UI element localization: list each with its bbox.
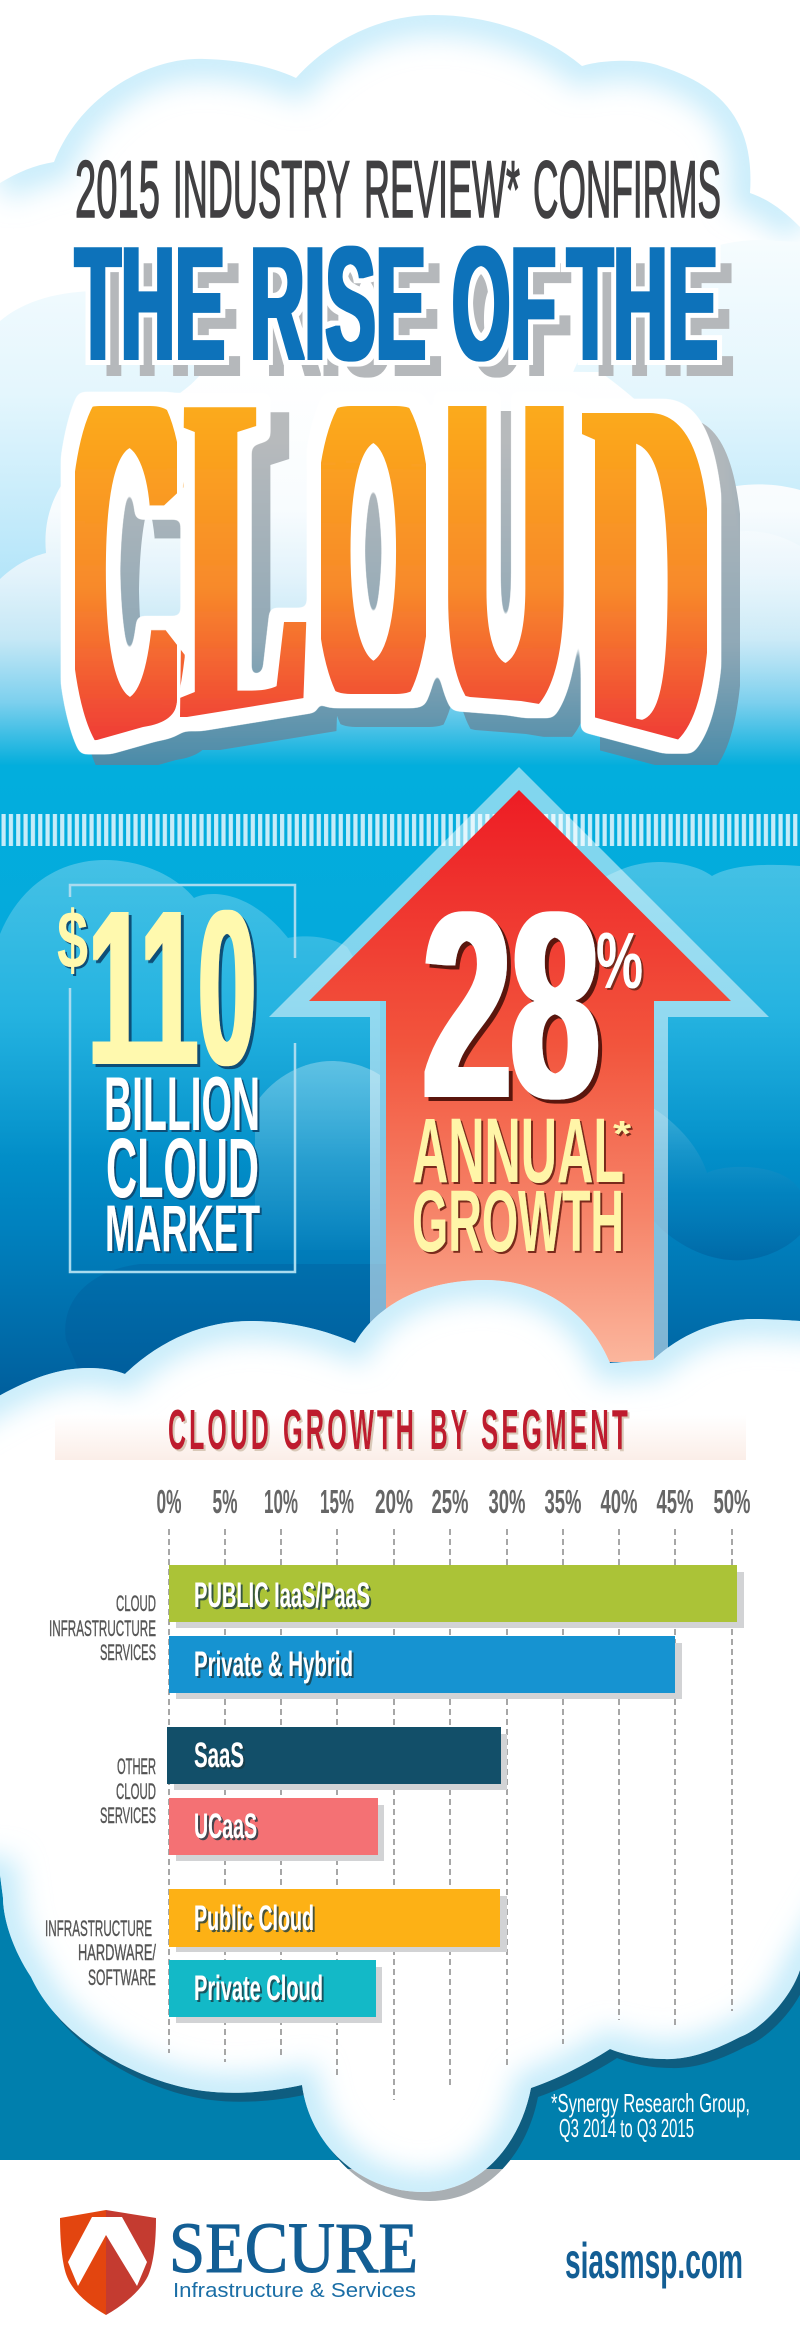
arrow body (309, 790, 731, 1362)
chart heading: BY (430, 1398, 470, 1462)
chart heading band (55, 1415, 746, 1460)
title: the rise of the: THE (91, 230, 241, 410)
icon: secure shield logo (60, 2210, 156, 2315)
title: the rise of the: RISE (250, 214, 426, 394)
title: cloud lettering: U (445, 306, 567, 808)
arrow outer glow (269, 767, 769, 1362)
axis labels: 5% (212, 1483, 238, 1520)
title line: 2015 industry review (75, 145, 721, 235)
axis labels: 25% (432, 1483, 468, 1520)
axis labels: 15% (320, 1483, 354, 1520)
category label: infrastructure hardware software: SOFTWARE (88, 1965, 156, 1990)
title line: 2015 industry review: INDUSTRY (173, 145, 350, 235)
box outline (70, 885, 295, 1272)
title: cloud lettering: C (70, 276, 182, 868)
blue market section background (0, 765, 800, 1425)
bar: private and hybrid (169, 1636, 675, 1693)
lower blue band (0, 1420, 800, 2160)
category label: cloud infrastructure services: SERVICES (100, 1640, 156, 1665)
bar: private cloud (169, 1960, 376, 2017)
company name: secure: SECURE (169, 2208, 418, 2288)
title: cloud lettering: L (183, 297, 307, 818)
category label: cloud infrastructure services: INFRASTRUCTURE (49, 1616, 156, 1641)
category label: infrastructure hardware software: HARDWARE/ (78, 1940, 157, 1965)
percent sign: % (596, 916, 643, 1005)
axis labels (156, 1483, 750, 1520)
axis labels: 45% (656, 1483, 694, 1520)
axis labels: 20% (375, 1483, 413, 1520)
category label: other cloud services: SERVICES (100, 1803, 156, 1828)
chart heading: CLOUD (168, 1398, 272, 1462)
title: cloud lettering: U (464, 325, 586, 827)
28 number: 28 (423, 857, 599, 1154)
bar: ucaas (169, 1798, 378, 1855)
market label: BILLION (104, 1062, 260, 1147)
market label: CLOUD (106, 1121, 259, 1215)
market label (104, 1062, 260, 1265)
back cloud with inner glow (0, 15, 800, 242)
market label: MARKET (105, 1191, 260, 1265)
value box: 110 billion cloud market (57, 864, 295, 1272)
title: the rise of the: OF (452, 214, 556, 394)
annual growth label: GROWTH (412, 1173, 624, 1270)
category label: other cloud services (100, 1754, 156, 1828)
bar labels: PUBLIC IaaS/PaaS (194, 1576, 370, 1615)
chart heading (168, 1398, 631, 1462)
sky background (0, 0, 800, 800)
company tagline: Infrastructure & Services (173, 2280, 416, 2302)
category label: cloud infrastructure services (49, 1591, 156, 1665)
axis labels: 30% (488, 1483, 526, 1520)
axis labels: 35% (544, 1483, 582, 1520)
title: cloud lettering: L (202, 316, 326, 837)
category label: infrastructure hardware software: INFRASTRUCTURE (45, 1916, 152, 1941)
title: the rise of the (75, 214, 734, 410)
title: the rise of the: THE (75, 214, 225, 394)
cloud shadow (53, 1970, 800, 2201)
category label: infrastructure hardware software (45, 1916, 157, 1990)
middle cloud layer (0, 240, 800, 800)
title: cloud lettering: L (183, 297, 307, 818)
growth arrow (269, 767, 769, 1362)
bar shadows (174, 1572, 744, 2023)
axis labels: 10% (264, 1483, 298, 1520)
bar labels: Public Cloud (194, 1899, 314, 1938)
title line: 2015 industry review: REVIEW* (364, 145, 520, 235)
value box: 110 billion cloud market: 110 (88, 864, 256, 1111)
title line: 2015 industry review: 2015 (75, 145, 160, 235)
translucent background clouds (0, 860, 800, 1420)
bar labels: UCaaS (194, 1807, 257, 1846)
chart heading: GROWTH (283, 1398, 417, 1462)
bar chart: cloud growth by segment (45, 1483, 750, 2100)
annual growth label: ANNUAL (412, 1100, 624, 1202)
bar: public iaas/paas (169, 1565, 737, 1622)
title: cloud lettering: O (316, 291, 431, 811)
front sky cloud layer (0, 371, 800, 800)
bar: public cloud (169, 1889, 500, 1947)
annual growth label (412, 1100, 631, 1270)
pale right cloud (705, 531, 800, 700)
bar labels: Private Cloud (194, 1969, 323, 2008)
axis labels: 0% (156, 1483, 182, 1520)
bar labels (194, 1576, 370, 2008)
title: the rise of the: THE (75, 214, 225, 394)
title: cloud lettering: U (445, 306, 567, 808)
title: cloud lettering: O (335, 310, 450, 830)
category label: other cloud services: OTHER (117, 1754, 156, 1779)
axis labels: 40% (600, 1483, 638, 1520)
title: cloud lettering (60, 392, 740, 765)
footnote (551, 2088, 750, 2143)
category label: other cloud services: CLOUD (116, 1779, 156, 1804)
title: the rise of the: RISE (250, 214, 426, 394)
striped band (0, 814, 800, 846)
foreground cloud panel (0, 1270, 800, 2200)
category label: cloud infrastructure services: CLOUD (116, 1591, 156, 1616)
annual growth label: * (613, 1113, 631, 1154)
title: cloud lettering: C (89, 295, 201, 887)
title: cloud lettering: C (70, 276, 182, 868)
title: the rise of the: OF (452, 214, 556, 394)
axis labels: 50% (714, 1483, 750, 1520)
title: the rise of the: RISE (266, 230, 442, 410)
bar labels: Private & Hybrid (194, 1645, 353, 1684)
bar: saas (167, 1727, 501, 1784)
footnote: Q3 2014 to Q3 2015 (559, 2113, 694, 2143)
bar labels: SaaS (194, 1736, 244, 1775)
title: the rise of the: OF (468, 230, 572, 410)
title: cloud lettering: O (316, 291, 431, 811)
dollar sign: $ (57, 895, 88, 986)
